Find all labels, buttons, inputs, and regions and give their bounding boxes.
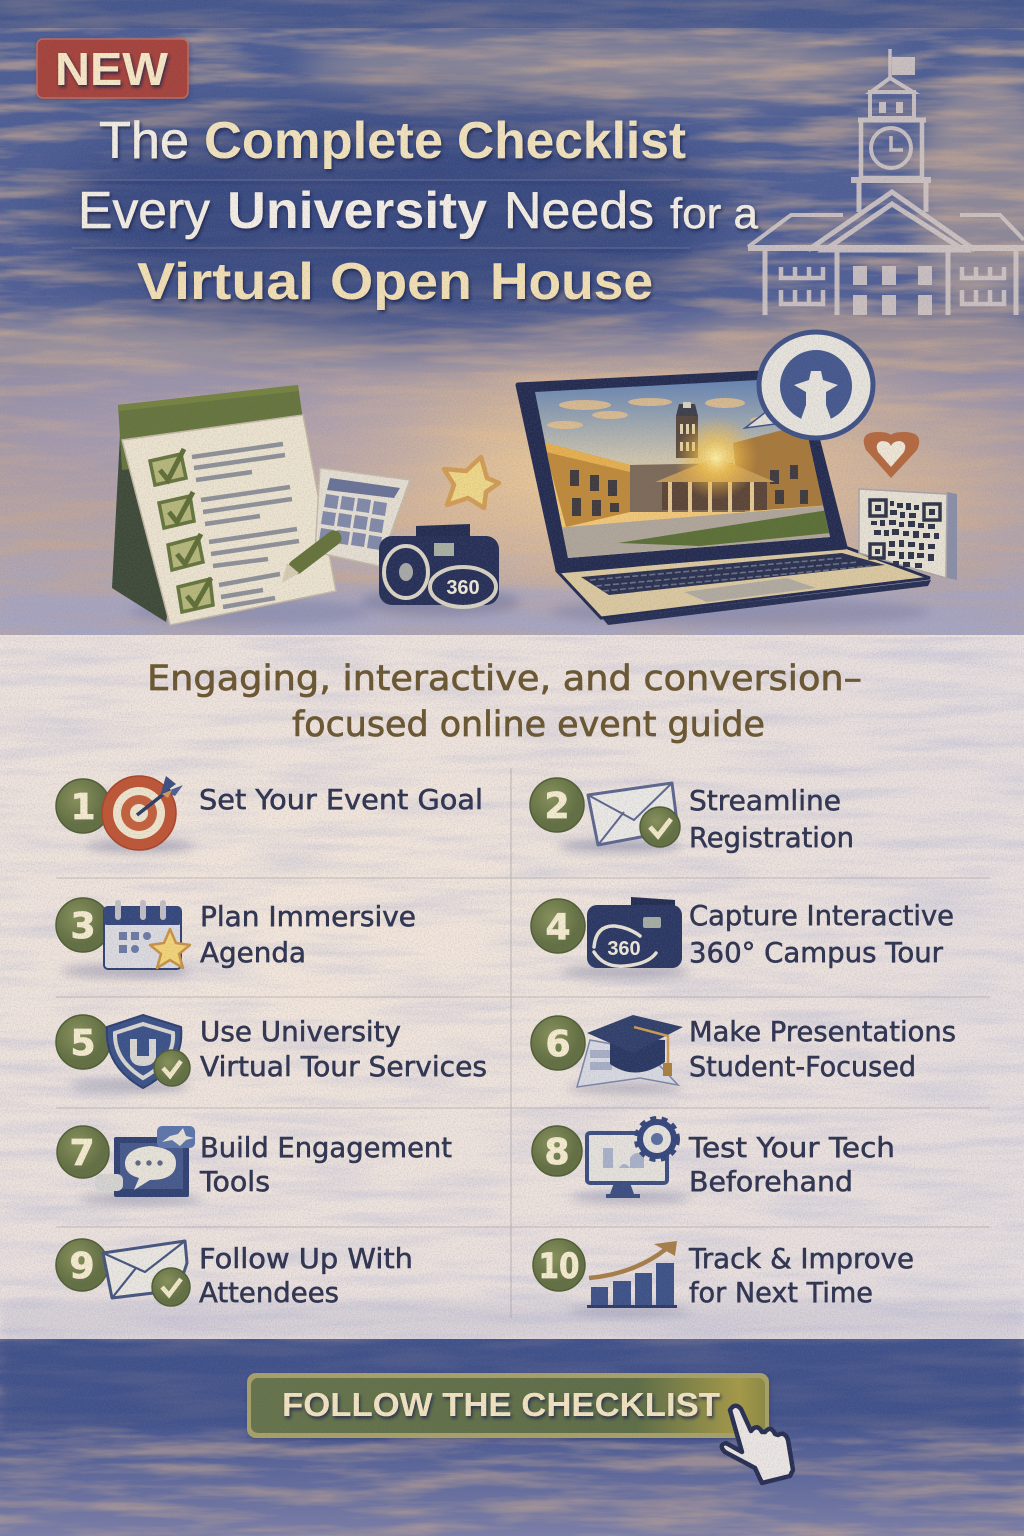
badge: NEW: NEW bbox=[55, 43, 169, 95]
item 1: set your event goal bbox=[56, 776, 483, 853]
subtitle bbox=[147, 659, 862, 745]
item 9: follow up with attendees: Attendees bbox=[199, 1277, 339, 1309]
item 8: test your tech beforehand bbox=[532, 1118, 895, 1204]
item 6: make presentations student-focused bbox=[531, 1015, 956, 1094]
illustration: laptop bbox=[518, 371, 931, 626]
background: cream checklist panel bbox=[0, 635, 1024, 1339]
item 9: follow up with attendees: 9 bbox=[69, 1246, 95, 1287]
title: Complete bbox=[204, 112, 443, 170]
icon: QR code card bbox=[859, 489, 957, 580]
title: Needs bbox=[504, 182, 654, 240]
item 4: capture interactive 360 campus tour: 4 bbox=[545, 907, 571, 948]
item 1: set your event goal: 1 bbox=[70, 787, 96, 828]
illustration: star bbox=[444, 457, 499, 508]
item 9: follow up with attendees bbox=[56, 1239, 413, 1309]
sub: checkbox rows bbox=[150, 444, 299, 612]
item 6: make presentations student-focused: 6 bbox=[545, 1024, 571, 1065]
item 9: follow up with attendees: Follow Up With bbox=[199, 1243, 413, 1275]
item 5: use university virtual tour services: Use University bbox=[200, 1016, 401, 1048]
item 7: build engagement tools: 7 bbox=[69, 1133, 95, 1174]
call to action button: FOLLOW THE CHECKLIST bbox=[282, 1386, 720, 1423]
icon: university building line art bbox=[748, 49, 1024, 315]
illustration: green pen bbox=[282, 538, 334, 583]
item 8: test your tech beforehand: 8 bbox=[544, 1132, 570, 1173]
background: hero sky texture bbox=[0, 0, 1024, 635]
illustration: 360 camera: 360 bbox=[446, 577, 480, 599]
item 2: streamline registration bbox=[530, 778, 854, 854]
badge: NEW bbox=[37, 39, 188, 98]
illustration: checklist notepad bbox=[112, 385, 370, 626]
item 6: make presentations student-focused: Student-Focused bbox=[689, 1051, 916, 1083]
item 3: plan immersive agenda bbox=[56, 898, 416, 978]
title: University bbox=[227, 182, 487, 240]
item 7: build engagement tools bbox=[57, 1126, 452, 1205]
title: Virtual bbox=[137, 253, 314, 311]
title: for a bbox=[670, 190, 758, 238]
title: Checklist bbox=[457, 112, 686, 170]
item 4: capture interactive 360 campus tour: Capture Interactive bbox=[689, 900, 954, 932]
icon: heart tag bbox=[864, 432, 919, 478]
sub: laptop base bbox=[558, 547, 930, 618]
icon: speech bubble with star bbox=[745, 332, 873, 438]
title: Open bbox=[330, 253, 472, 311]
item 7: build engagement tools: Build Engagement bbox=[200, 1132, 452, 1164]
item 10: track and improve for next time: for Next Time bbox=[689, 1277, 873, 1309]
background: footer band bbox=[0, 1339, 1024, 1536]
item 8: test your tech beforehand: Beforehand bbox=[689, 1166, 853, 1198]
illustration: 360 camera bbox=[360, 524, 520, 616]
call to action button bbox=[247, 1373, 769, 1438]
item 2: streamline registration: 2 bbox=[544, 786, 570, 827]
item 3: plan immersive agenda: Agenda bbox=[200, 937, 306, 969]
item 10: track and improve for next time bbox=[533, 1239, 914, 1316]
item 2: streamline registration: Streamline bbox=[689, 785, 841, 817]
icon: pointing hand cursor bbox=[722, 1406, 793, 1483]
item 4: capture interactive 360 campus tour bbox=[531, 897, 954, 979]
item 5: use university virtual tour services: Virtual Tour Services bbox=[200, 1051, 487, 1083]
sub: campus photo bbox=[530, 374, 835, 565]
illustration: calendar sheet bbox=[315, 468, 410, 566]
title: House bbox=[490, 253, 653, 311]
item 3: plan immersive agenda: 3 bbox=[70, 906, 96, 947]
item 10: track and improve for next time: Track & Improve bbox=[688, 1243, 914, 1275]
subtitle: focused online event guide bbox=[292, 705, 765, 745]
item 1: set your event goal: Set Your Event Goal bbox=[199, 784, 483, 816]
sub: laptop screen frame bbox=[518, 371, 845, 570]
item 2: streamline registration: Registration bbox=[689, 822, 854, 854]
item 5: use university virtual tour services bbox=[56, 1015, 487, 1092]
item 4: capture interactive 360 campus tour: 360 bbox=[607, 938, 641, 960]
item 5: use university virtual tour services: 5 bbox=[70, 1023, 96, 1064]
item 3: plan immersive agenda: Plan Immersive bbox=[200, 901, 416, 933]
title bbox=[65, 112, 758, 311]
item 6: make presentations student-focused: Make Presentations bbox=[689, 1016, 956, 1048]
item 7: build engagement tools: Tools bbox=[199, 1166, 270, 1198]
item 10: track and improve for next time: 10 bbox=[538, 1247, 580, 1287]
item 4: capture interactive 360 campus tour: 360° Campus Tour bbox=[689, 937, 944, 969]
subtitle: Engaging, interactive, and conversion– bbox=[147, 659, 862, 699]
title: Every bbox=[78, 182, 210, 240]
item 8: test your tech beforehand: Test Your Tech bbox=[688, 1132, 895, 1164]
title: The bbox=[99, 112, 189, 170]
